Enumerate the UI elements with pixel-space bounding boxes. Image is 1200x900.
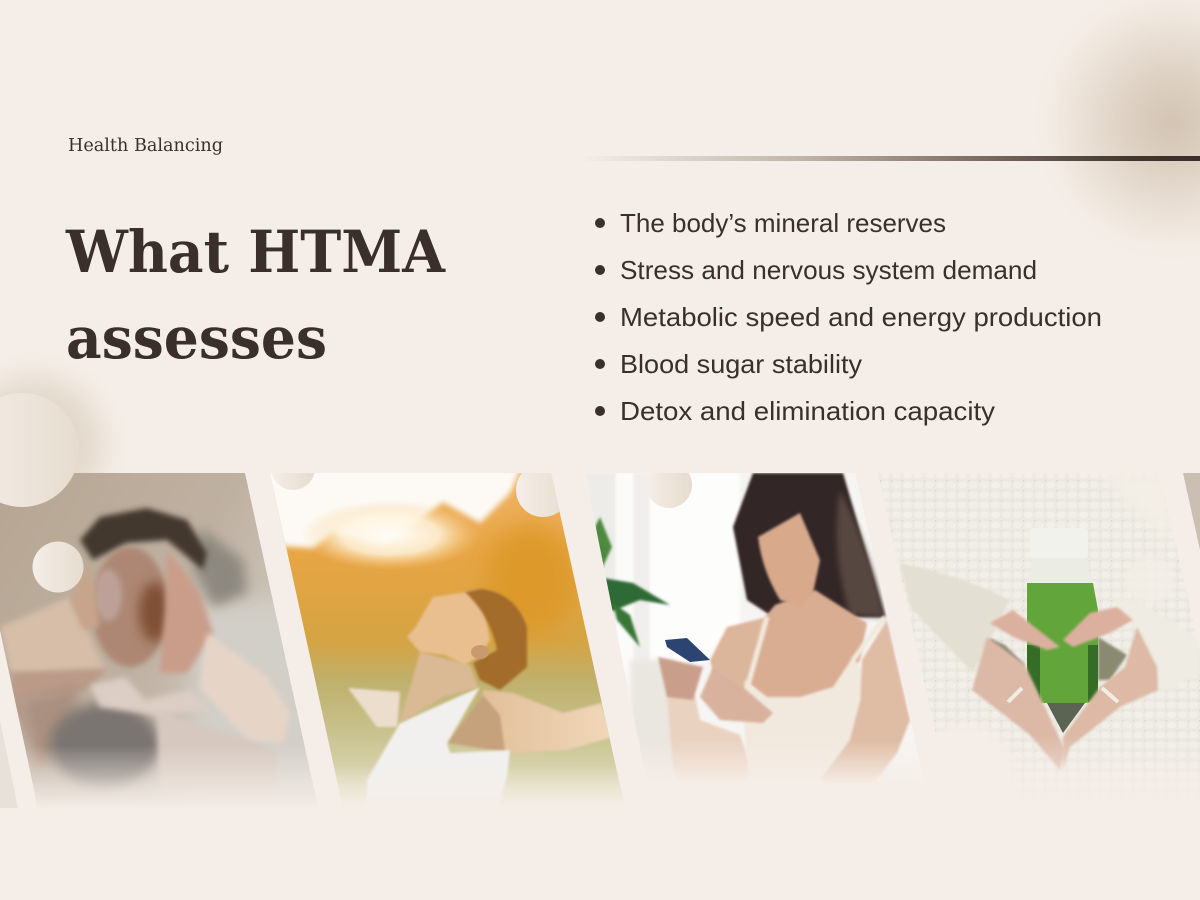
left cuff [900,563,1010,673]
right hand [1063,607,1158,770]
divider bar [578,156,1200,161]
hands [70,563,100,630]
hair [80,508,207,570]
circle accent [648,473,692,508]
raised hand [348,688,400,727]
title: assesses [66,304,327,372]
hair shadow [195,527,247,607]
large circle accent over left panel [0,393,79,507]
circle accent [1126,556,1174,604]
darker foliage right [485,525,575,635]
hair back [733,473,885,617]
hair [465,589,527,690]
pale fade: bottom left [915,725,1015,835]
sliver panel: far left [0,722,18,808]
bullet list: Detox and elimination capacity [620,396,995,426]
bottle [1027,528,1098,733]
photo panel: woman testing blood sugar [595,473,917,780]
rings [1008,688,1118,702]
photo panel: stressed man [0,473,330,810]
pale shirt [154,714,262,774]
left hand [972,610,1065,770]
bullet list: Metabolic speed and energy production [620,302,1102,332]
neck and chest [745,590,867,700]
bullet list: Blood sugar stability [620,349,862,379]
hands and meter [658,638,773,723]
photo panel: woman in sunlight [270,473,624,804]
bullet list [595,208,1102,426]
sky and tree line [265,468,560,548]
right cuff [1122,600,1200,690]
pale fade: top right [1100,473,1170,540]
face [407,590,490,665]
forearm [666,695,748,778]
neck [400,652,478,723]
knit dark shadows [990,638,1026,666]
circle accent top [272,473,314,490]
bullet list: Stress and nervous system demand [620,255,1037,285]
shoulder left [708,616,765,689]
tank top [367,687,510,810]
face [92,547,168,667]
decorative glow: top right [1024,0,1200,270]
plant [588,517,670,647]
bullet list: The body’s mineral reserves [620,208,946,238]
photo panel: knitwear and green juice [878,473,1200,791]
right arm [824,620,910,780]
decorative glow: left [0,345,135,545]
dark shirt [50,703,160,787]
shoulder and arm [480,690,612,753]
circle accent [32,542,84,592]
title: What HTMA [65,218,446,286]
left arm [0,597,110,673]
right arm sleeve [200,633,290,743]
sliver panel: far right [1180,473,1200,563]
face [758,513,820,607]
circle accent [516,473,560,517]
eyebrow: Health Balancing: Health Balancing [68,136,223,156]
tank top [742,617,885,790]
title [65,218,446,372]
